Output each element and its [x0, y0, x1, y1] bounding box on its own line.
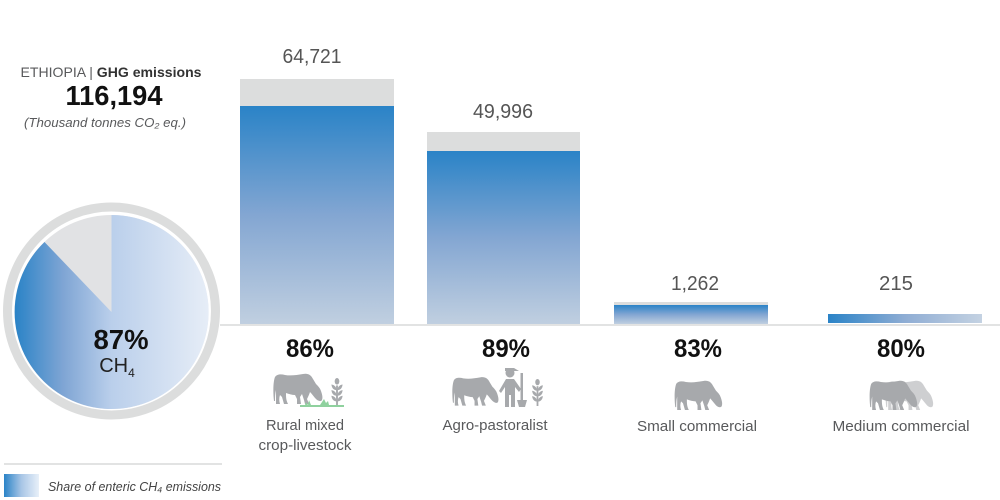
- bar: medium commercial: [828, 273, 982, 323]
- pie value: 87%: [94, 324, 149, 355]
- bar: rural mixed crop-livestock: 64,721: [282, 46, 342, 68]
- unit note: (Thousand tonnes CO₂ eq.): [24, 115, 186, 130]
- headline block: [20, 64, 202, 130]
- column: rural mixed crop-livestock: crop-livestock: [258, 438, 352, 454]
- bar: small commercial: 1,262: [671, 273, 719, 295]
- bar: rural mixed crop-livestock: [240, 46, 394, 324]
- title: ETHIOPIA | GHG emissions: [20, 64, 202, 80]
- pie chart: CH4 share: [8, 207, 216, 415]
- column: medium commercial: [832, 335, 970, 435]
- label: Rural mixed: [266, 418, 344, 434]
- pie label: CH: [99, 355, 128, 377]
- share value: 80%: [877, 335, 925, 363]
- bar: agro-pastoralist: 49,996: [473, 101, 533, 123]
- column: small commercial: [637, 335, 757, 435]
- bar: medium commercial: 215: [879, 273, 913, 295]
- legend: [4, 463, 222, 497]
- axis baseline: [220, 324, 1000, 326]
- total emissions value: 116,194: [66, 80, 163, 111]
- label: Small commercial: [637, 419, 757, 435]
- share value: 83%: [674, 335, 722, 363]
- icon: two cows: [870, 381, 933, 410]
- icon: cow: [675, 381, 722, 410]
- pie label: 4: [128, 366, 135, 380]
- icon: cow with grass and wheat: [273, 374, 344, 407]
- icon: cow, farmer with spade and wheat: [452, 368, 543, 407]
- label: Agro-pastoralist: [442, 418, 548, 434]
- column: agro-pastoralist: [442, 335, 548, 434]
- column: rural mixed crop-livestock: [258, 335, 352, 454]
- label: Medium commercial: [832, 419, 970, 435]
- legend: Share of enteric CH₄ emissions: [48, 480, 221, 494]
- bar: small commercial: [614, 273, 768, 324]
- bar: agro-pastoralist: [427, 101, 580, 324]
- share value: 89%: [482, 335, 530, 363]
- share value: 86%: [286, 335, 334, 363]
